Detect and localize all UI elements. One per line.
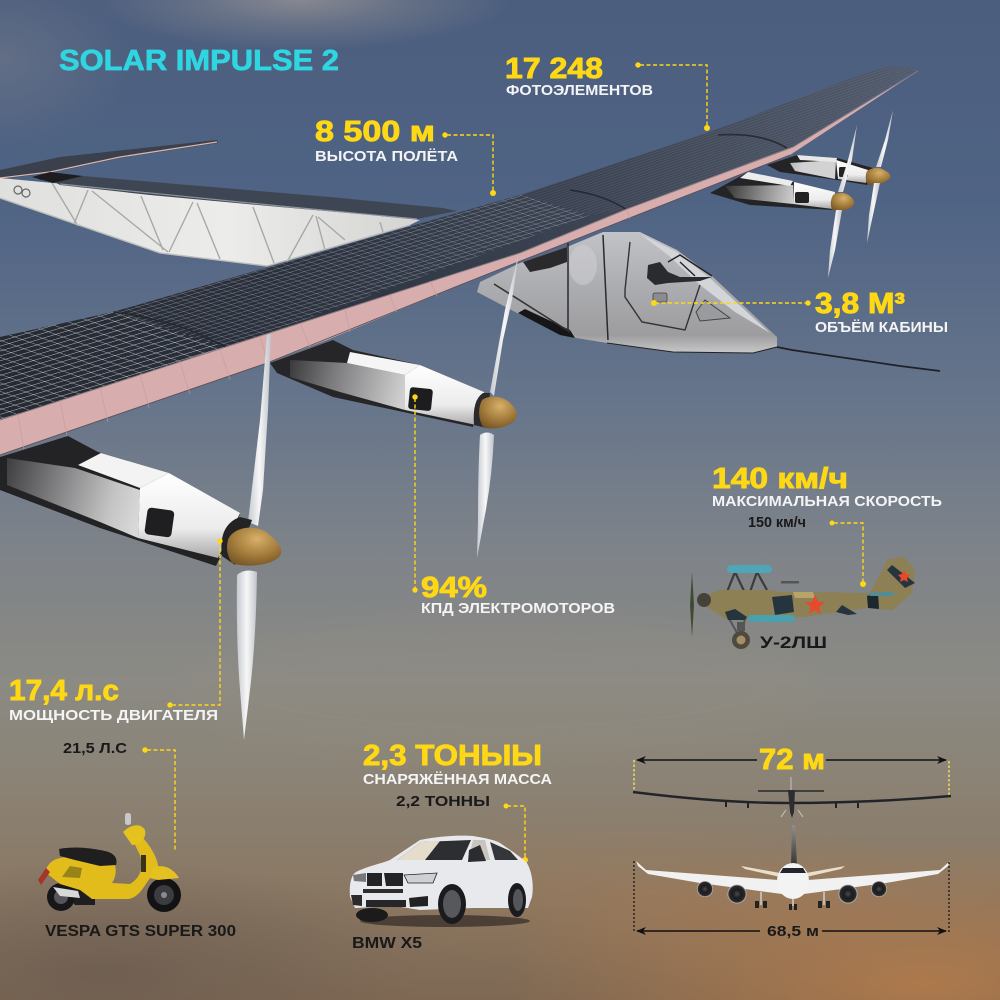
front right nacelle [710,125,857,278]
callout: maximum speed: МАКСИМАЛЬНАЯ СКОРОСТЬ [712,493,942,510]
wingspan comparison: Solar Impulse front view: 72 м [759,744,825,776]
rear stabilizer with truss panel [0,172,457,266]
callout: motor efficiency: 94% [421,572,487,604]
callout: scooter comparison power: 21,5 Л.С [63,740,127,757]
solar cell grid outer section [0,312,233,420]
solar cell grid middle section [113,195,590,349]
callout: solar cells: 17 248 [505,53,603,85]
solar surface [0,66,918,420]
fuselage and cockpit [477,232,777,353]
callout: altitude: ВЫСОТА ПОЛЁТА [315,148,458,165]
callout: cabin volume: ОБЪЁМ КАБИНЫ [815,319,948,336]
pitot probe [777,347,940,371]
callout: engine power: 17,4 л.с [9,675,119,707]
callout: motor efficiency [412,394,615,617]
callout: curb weight: 2,2 ТОННЫ [396,793,490,810]
callout: maximum speed: 140 км/ч [712,463,848,495]
callout: solar cells: ФОТОЭЛЕМЕНТОВ [506,82,653,99]
callout: curb weight: 2,3 ТОНЫЫ [363,740,542,772]
callout: solar cells [505,53,710,131]
callout: cabin volume: 3,8 М³ [815,288,905,320]
callout: altitude [315,116,496,196]
callout: motor efficiency: КПД ЭЛЕКТРОМОТОРОВ [421,600,615,617]
wing ribs [113,135,787,351]
callout: scooter comparison power [63,740,175,852]
centre propeller and nacelle [270,252,519,558]
callout: maximum speed: 150 км/ч [748,514,806,531]
title: SOLAR IMPULSE 2 [59,45,339,77]
icon: U-2LSh biplane [690,556,915,649]
wingspan comparison: airliner front view: 68,5 м [767,923,819,940]
upper tailplane [0,140,218,180]
label: U-2LSh: У-2ЛШ [760,633,827,652]
rear right nacelle [767,110,893,243]
callout: curb weight [363,740,552,863]
icon: white BMW car [350,836,533,927]
wingspan comparison: airliner front view [634,825,950,940]
icon: yellow Vespa scooter [38,813,181,912]
solar cell strips inner section [520,66,918,215]
label: BMW: BMW X5 [352,935,422,952]
left propeller and nacelle [0,334,281,740]
callout: cabin volume [651,288,948,336]
main wing [0,66,918,455]
callout: altitude: 8 500 м [315,116,435,148]
callout: engine power: МОЩНОСТЬ ДВИГАТЕЛЯ [9,707,218,724]
callout: engine power [9,538,223,724]
callout: maximum speed [712,463,942,587]
wingspan comparison: Solar Impulse front view [633,744,951,818]
callout: curb weight: СНАРЯЖЁННАЯ МАССА [363,771,552,788]
label: Vespa: VESPA GTS SUPER 300 [45,923,236,940]
pink leading edge [0,71,918,455]
